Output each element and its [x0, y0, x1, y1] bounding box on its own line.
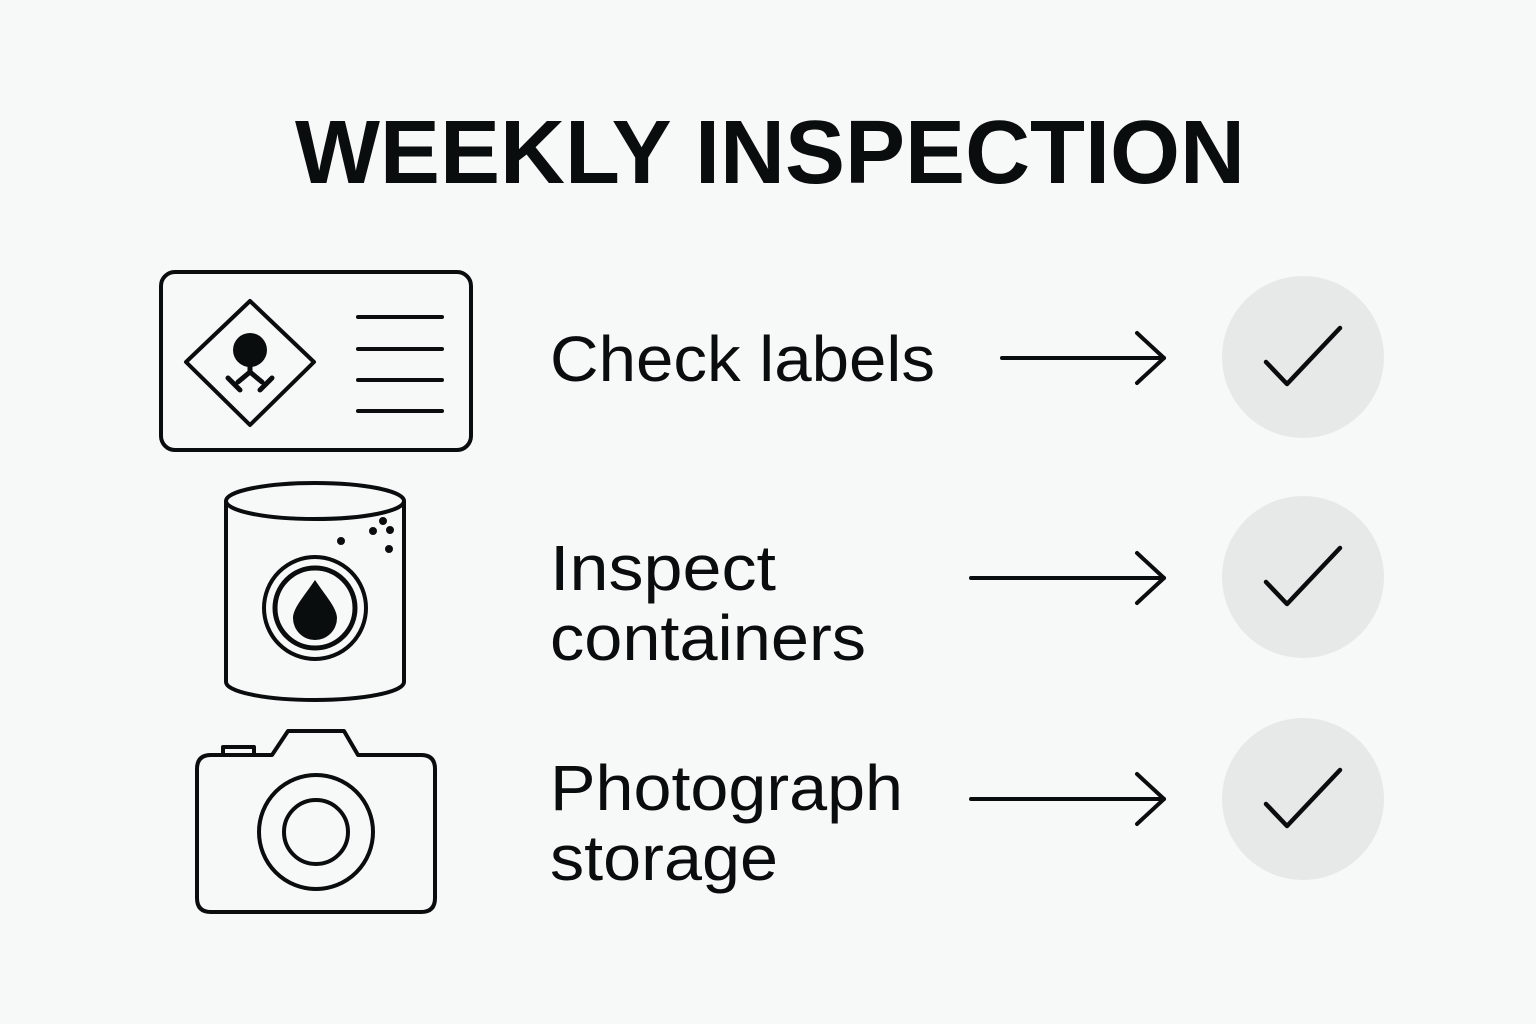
arrow 1	[1002, 333, 1164, 383]
text: check labels: Check labels	[550, 323, 935, 395]
text: storage	[550, 822, 778, 894]
title: WEEKLY INSPECTION	[295, 103, 1245, 203]
text: photograph storage: Photograph	[550, 752, 903, 824]
arrow 2	[971, 553, 1164, 603]
text: inspect containers: Inspect	[550, 532, 776, 604]
icon: container	[226, 483, 404, 700]
text: containers	[550, 602, 866, 674]
check circle 3	[1222, 718, 1384, 880]
check circle 1	[1222, 276, 1384, 438]
arrow 3	[971, 774, 1164, 824]
check circle 2	[1222, 496, 1384, 658]
icon: camera	[197, 731, 435, 912]
icon: hazard label	[161, 272, 471, 450]
